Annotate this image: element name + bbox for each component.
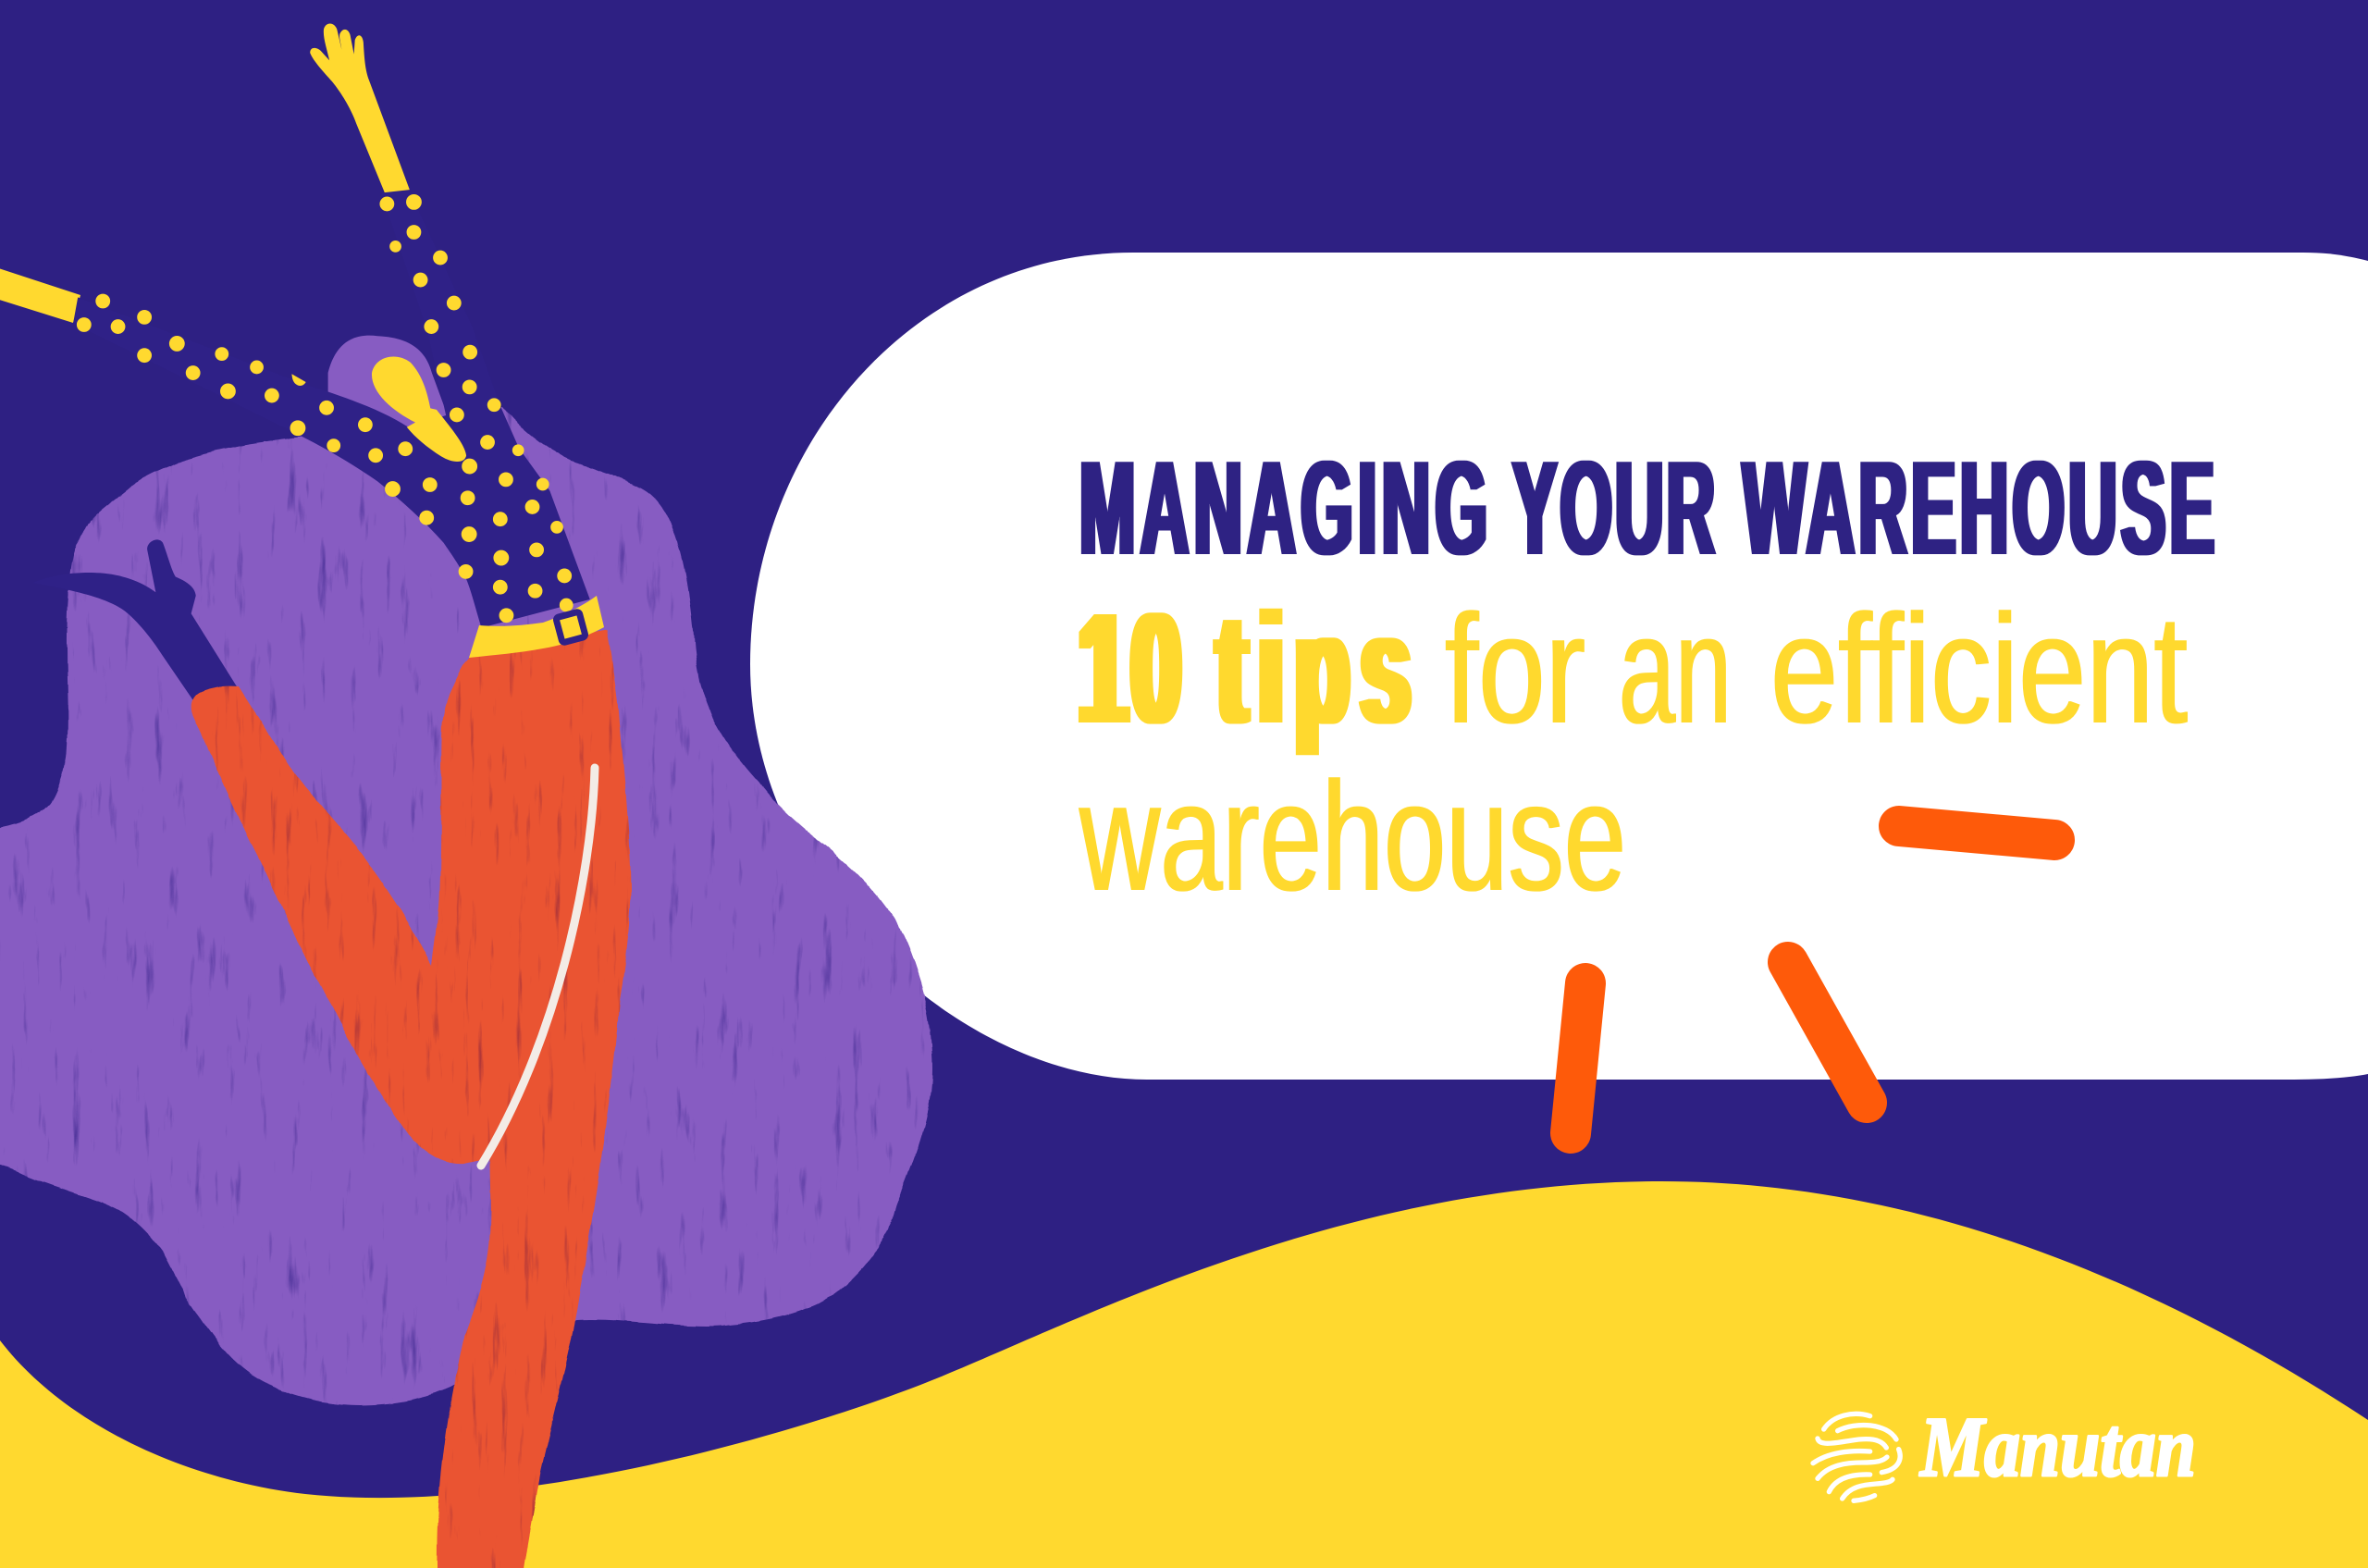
subtitle bold: 10 tips bbox=[1079, 581, 1410, 757]
title: managing your warehouse bbox=[1079, 434, 2214, 584]
logo: Manutan bbox=[1813, 1400, 2196, 1500]
subtitle light: for an efficient warehouse: efficient bbox=[1770, 582, 2188, 756]
orange trousers bbox=[191, 630, 631, 1568]
logo fingerprint icon bbox=[1813, 1414, 1900, 1500]
orange accent dashes bbox=[1571, 826, 2054, 1133]
navy heeled shoe bbox=[33, 539, 239, 701]
subtitle light: for an efficient warehouse: for bbox=[1445, 582, 1585, 756]
purple blob bbox=[0, 406, 932, 1405]
title: managing your warehouse: WAREHOUSE bbox=[1743, 434, 2214, 584]
subtitle light: for an efficient warehouse: an bbox=[1619, 582, 1732, 756]
navy patterned top with sleeves bbox=[73, 191, 590, 628]
purple hair bbox=[328, 336, 449, 429]
logo wordmark: Manutan bbox=[1918, 1400, 2196, 1494]
subtitle light: for an efficient warehouse: warehouse bbox=[1079, 749, 1626, 923]
character illustration bbox=[0, 24, 631, 1568]
title: managing your warehouse: YOUR bbox=[1512, 434, 1715, 584]
title: managing your warehouse: MANAGING bbox=[1079, 434, 1487, 584]
white trouser stripe bbox=[481, 768, 595, 1166]
yellow belt bbox=[469, 596, 604, 658]
belt buckle bbox=[556, 611, 586, 643]
subtitle bold: 10 tips: 10 bbox=[1079, 581, 1180, 757]
polka dots bbox=[78, 195, 573, 622]
subtitle bold: 10 tips: tips bbox=[1217, 581, 1410, 757]
subtitle light: for an efficient warehouse bbox=[1079, 582, 2188, 923]
left yellow forearm bbox=[0, 263, 80, 323]
yellow wave bbox=[0, 1181, 2368, 1568]
white speech bubble bbox=[750, 253, 2368, 1080]
yellow face bbox=[372, 357, 466, 462]
raised yellow hand and forearm bbox=[310, 24, 410, 192]
